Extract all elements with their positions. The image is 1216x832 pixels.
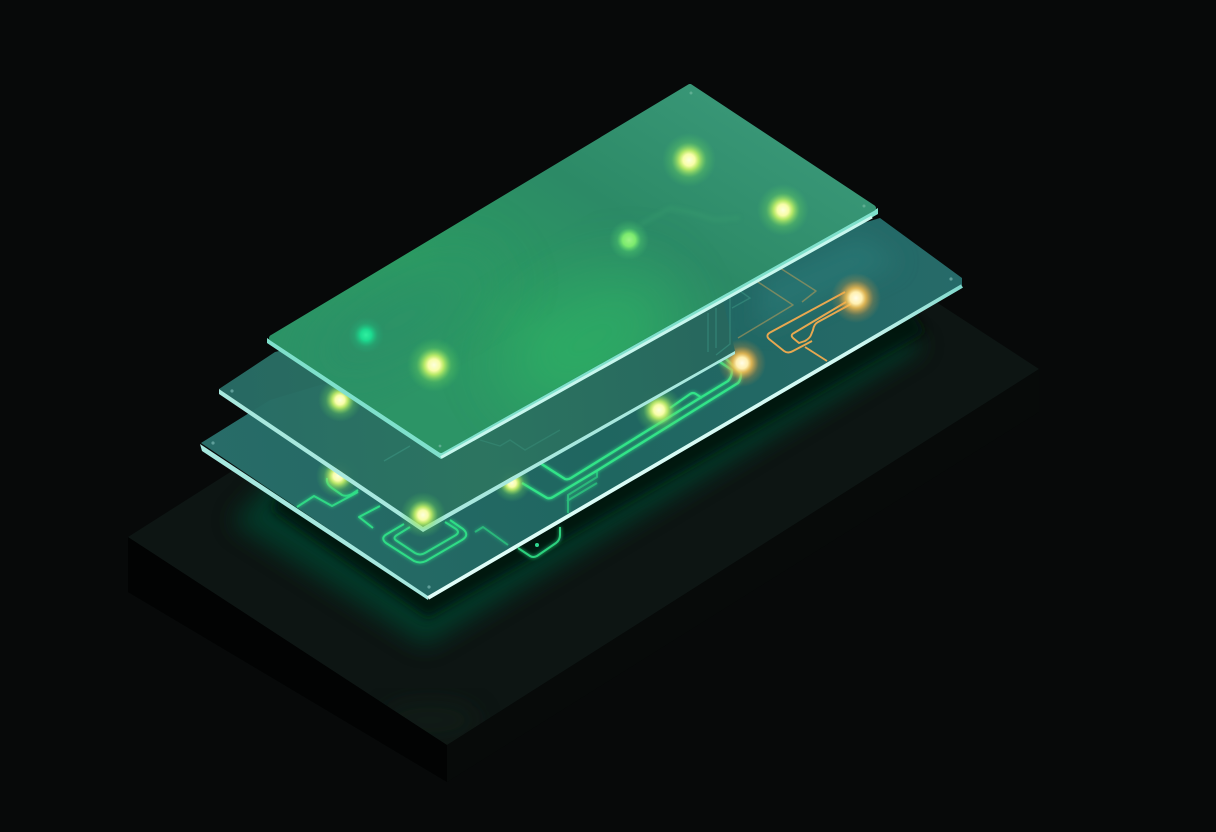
middle plate: [219, 250, 750, 538]
middle plate edge: [219, 351, 735, 532]
teal sheen: [760, 235, 900, 330]
green glow on base: [234, 340, 920, 648]
screw hole: [230, 389, 234, 393]
bottom plate: [200, 218, 962, 600]
plate sheen: [520, 273, 670, 396]
faint traces in middle plate: [384, 291, 750, 461]
top plate edge: [267, 208, 878, 459]
bottom plate surface: [201, 218, 962, 596]
screw holes: [211, 277, 953, 589]
base block: [128, 161, 1039, 782]
node: top lower: [407, 338, 461, 392]
node: edge: [493, 464, 531, 502]
base left side face: [128, 537, 447, 782]
bottom plate left edge: [200, 444, 428, 600]
base top face: [128, 161, 1039, 745]
isometric illustration: [128, 84, 1038, 744]
node: middle bottom: [400, 492, 446, 538]
node: teal: [348, 317, 384, 353]
node: bottom center: [635, 386, 683, 434]
node: top upper: [662, 133, 716, 187]
node: top right: [757, 184, 809, 236]
screw holes: [439, 92, 866, 447]
orange circuit traces: [767, 292, 851, 361]
bottom plate highlight edge: [428, 286, 962, 598]
top plate surface: [272, 87, 873, 450]
base right side face: [447, 369, 1039, 782]
node: junction: [718, 339, 766, 387]
node: middle left: [318, 378, 362, 422]
via dot: [535, 543, 539, 547]
node: top center: [609, 220, 649, 260]
top plate: [267, 87, 878, 459]
green circuit traces: [297, 358, 741, 562]
top plate highlight edge: [441, 217, 872, 458]
node: bottom left: [316, 454, 360, 498]
middle plate surface: [219, 250, 735, 527]
node: orange right: [831, 273, 881, 323]
plate shadow: [272, 300, 925, 618]
faint orange traces: [738, 268, 816, 338]
